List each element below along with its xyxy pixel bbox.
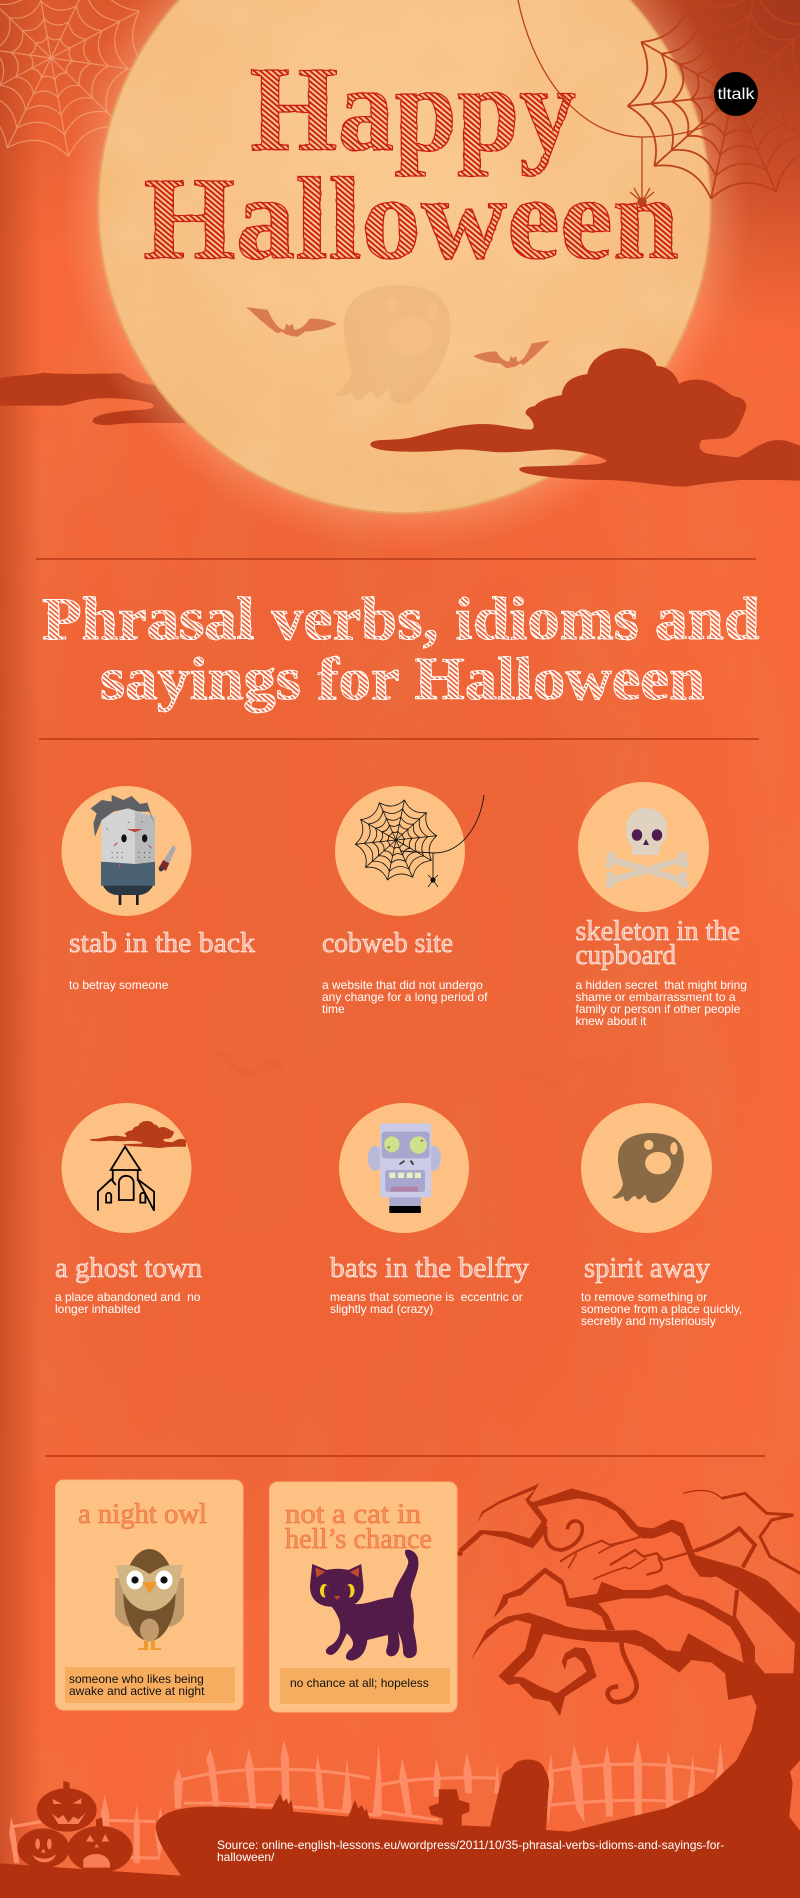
ground and hill bbox=[0, 1793, 470, 1898]
label: stab in the back bbox=[69, 928, 255, 959]
gravestone and cross bbox=[429, 1760, 549, 1832]
ghost on moon bbox=[334, 285, 451, 404]
moon bbox=[60, 0, 750, 552]
fence bbox=[9, 1740, 723, 1863]
heading: phrasal verbs bbox=[42, 586, 760, 712]
label: skeleton in the bbox=[576, 916, 740, 947]
logo: tltalk: tltalk bbox=[718, 86, 756, 103]
item: spirit away bbox=[581, 1103, 742, 1328]
heading: phrasal verbs: Phrasal verbs, idioms and bbox=[42, 586, 760, 652]
icon: masked slasher bbox=[91, 795, 176, 905]
definition: no chance at all; hopeless bbox=[290, 1676, 429, 1690]
definition: someone who likes being bbox=[69, 1672, 204, 1686]
label: bats in the belfry bbox=[330, 1253, 529, 1284]
description: family or person if other people bbox=[576, 1002, 741, 1016]
divider bbox=[45, 1455, 765, 1457]
tree bbox=[450, 1483, 800, 1898]
icon: black cat bbox=[310, 1550, 418, 1661]
description: a place abandoned and no bbox=[55, 1290, 201, 1304]
spider web, top right bbox=[599, 0, 800, 227]
item: cobweb site bbox=[322, 786, 488, 1016]
description: a website that did not undergo bbox=[322, 978, 483, 992]
description: slightly mad (crazy) bbox=[330, 1302, 433, 1316]
icon: cobweb and spider bbox=[344, 789, 484, 891]
description: time bbox=[322, 1002, 345, 1016]
source: halloween/ bbox=[217, 1850, 275, 1864]
definition box bbox=[280, 1668, 450, 1704]
label: spirit away bbox=[584, 1253, 710, 1284]
description: any change for a long period of bbox=[322, 990, 488, 1004]
label: cobweb site bbox=[322, 928, 453, 959]
description: longer inhabited bbox=[55, 1302, 140, 1316]
card: a night owl bbox=[56, 1480, 243, 1710]
divider bbox=[39, 738, 759, 740]
pumpkins bbox=[17, 1781, 133, 1873]
description: shame or embarrassment to a bbox=[576, 990, 736, 1004]
card heading: not a cat in bbox=[285, 1499, 421, 1530]
divider bbox=[36, 558, 756, 560]
title: Happy Halloween: Happy bbox=[250, 42, 576, 177]
icon: skull and crossbones bbox=[606, 808, 688, 888]
spider web, top left bbox=[0, 0, 181, 186]
spider thread and spider bbox=[518, 0, 713, 206]
item: bats in the belfry bbox=[330, 1103, 529, 1316]
cloud behind moon, left bbox=[0, 373, 188, 425]
icon: zombie head bbox=[368, 1123, 441, 1213]
definition: awake and active at night bbox=[69, 1684, 205, 1698]
item: skeleton in the cupboard bbox=[576, 782, 747, 1028]
source: Source: online-english-lessons.eu/wordpress/2011/10/35-phrasal-verbs-idioms-and-sayings-for- bbox=[217, 1838, 724, 1852]
card heading: a night owl bbox=[78, 1499, 207, 1530]
title: Happy Halloween bbox=[143, 42, 679, 284]
cloud in front of moon bbox=[370, 348, 800, 487]
description: knew about it bbox=[576, 1014, 647, 1028]
icon: ghost bbox=[612, 1133, 684, 1203]
description: someone from a place quickly, bbox=[581, 1302, 742, 1316]
heading: phrasal verbs: sayings for Halloween bbox=[100, 646, 705, 712]
icon: cloud over church bbox=[90, 1121, 186, 1211]
card: not a cat in hell's chance bbox=[270, 1482, 457, 1712]
bats on moon bbox=[246, 307, 550, 368]
logo: tltalk bbox=[714, 72, 758, 116]
description: means that someone is eccentric or bbox=[330, 1290, 523, 1304]
description: to remove something or bbox=[581, 1290, 707, 1304]
title: Happy Halloween: Halloween bbox=[143, 153, 679, 284]
definition box bbox=[65, 1667, 235, 1703]
icon: owl bbox=[115, 1549, 184, 1650]
label: cupboard bbox=[576, 940, 676, 971]
item: stab in the back bbox=[62, 786, 255, 992]
description: secretly and mysteriously bbox=[581, 1314, 716, 1328]
label: a ghost town bbox=[55, 1253, 202, 1284]
description: a hidden secret that might bring bbox=[576, 978, 747, 992]
description: to betray someone bbox=[69, 978, 169, 992]
item: a ghost town bbox=[55, 1103, 202, 1316]
card heading: hell’s chance bbox=[285, 1524, 432, 1555]
